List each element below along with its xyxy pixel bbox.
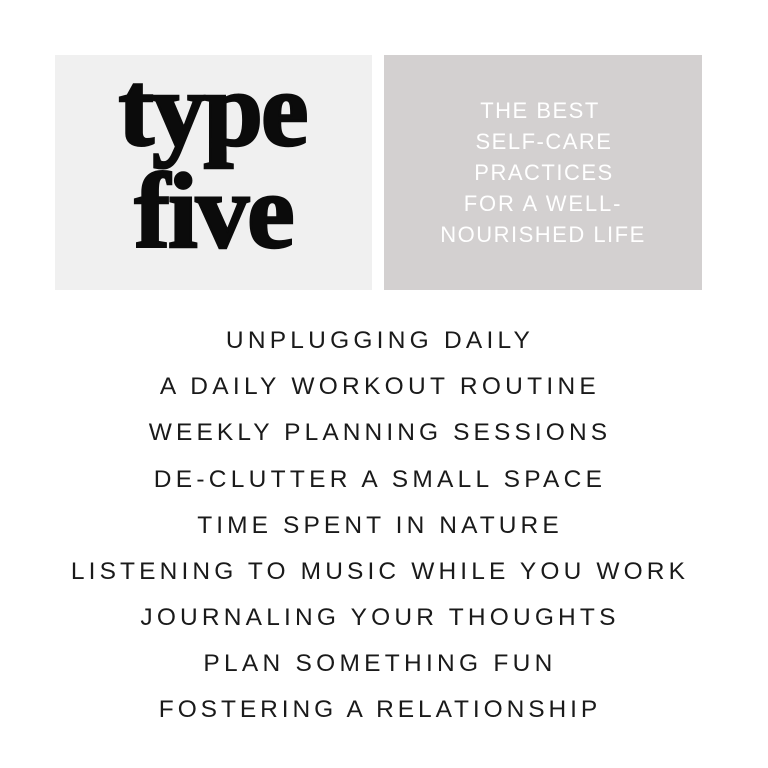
- text: subtitle: THE BEST: [480, 98, 600, 123]
- panel: title: [55, 55, 372, 290]
- list item 8: PLAN SOMETHING FUN: [203, 650, 557, 677]
- text: subtitle: PRACTICES: [474, 160, 614, 185]
- text: subtitle: SELF-CARE: [476, 129, 612, 154]
- text: subtitle: NOURISHED LIFE: [440, 222, 646, 247]
- list item 7: JOURNALING YOUR THOUGHTS: [140, 604, 620, 631]
- list item 2: A DAILY WORKOUT ROUTINE: [160, 373, 600, 400]
- heading: five: five: [134, 153, 293, 271]
- text: subtitle: FOR A WELL-: [464, 191, 622, 216]
- list: self-care practices: [71, 327, 689, 723]
- list item 1: UNPLUGGING DAILY: [226, 327, 534, 354]
- list item 4: DE-CLUTTER A SMALL SPACE: [154, 466, 606, 493]
- list item 5: TIME SPENT IN NATURE: [197, 512, 563, 539]
- panel: subtitle: [384, 55, 702, 290]
- list item 9: FOSTERING A RELATIONSHIP: [159, 696, 601, 723]
- list item 6: LISTENING TO MUSIC WHILE YOU WORK: [71, 558, 689, 585]
- text: subtitle: [440, 98, 646, 247]
- heading: type: type: [118, 51, 307, 169]
- list item 3: WEEKLY PLANNING SESSIONS: [149, 419, 611, 446]
